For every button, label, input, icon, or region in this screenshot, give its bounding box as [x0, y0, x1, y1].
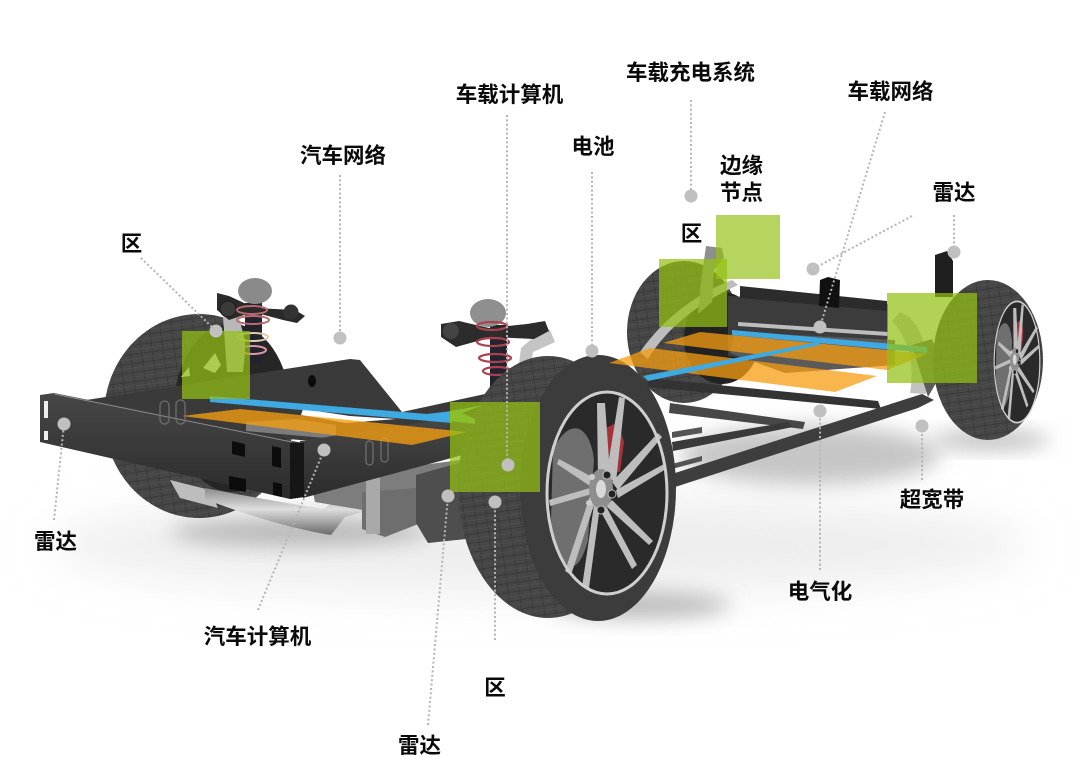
label: 区 rear: 区: [681, 222, 702, 246]
frame rails: [40, 359, 485, 499]
front strut: [441, 299, 555, 395]
zone: rear right: [887, 293, 977, 383]
zone blocks: [182, 215, 977, 492]
label: 超宽带: 超宽带: [900, 487, 964, 512]
label: 电气化: 电气化: [788, 580, 852, 604]
rear chassis: [640, 246, 953, 488]
undercarriage: [170, 460, 466, 543]
anchor dots: [58, 190, 960, 508]
label: 汽车计算机: 汽车计算机: [204, 625, 312, 649]
label: 区 bottom: 区: [484, 676, 506, 700]
label: 雷达 bottom: 雷达: [398, 734, 441, 758]
label: 汽车网络: 汽车网络: [300, 143, 386, 168]
zone: front right: [450, 402, 540, 492]
edge node block: [716, 215, 780, 279]
label: 边缘节点: 节点: [720, 181, 763, 205]
front battery plate: [182, 409, 467, 445]
label: 雷达 upper right: 雷达: [932, 181, 976, 205]
electrification plates: [182, 332, 927, 445]
floor shadows: [50, 425, 1050, 619]
far back wheel: [627, 261, 760, 403]
label: 车载网络: 车载网络: [847, 79, 934, 104]
network lines: [210, 330, 927, 424]
zone: front left: [182, 331, 250, 399]
label: 区 front left: 区: [121, 232, 142, 256]
label: 雷达 left: 雷达: [34, 530, 77, 554]
zone: rear left: [659, 259, 727, 327]
label: 边缘节点: [720, 154, 763, 205]
label: 边缘节点: 边缘: [720, 154, 763, 178]
far left wheel: [104, 314, 294, 518]
chassis illustration: [40, 246, 1043, 621]
left suspension strut: [217, 278, 305, 372]
right wheel: [933, 280, 1043, 440]
labels: [34, 60, 976, 758]
label: 电池: 电池: [571, 135, 615, 159]
rear battery plates: [663, 332, 927, 370]
label: 车载计算机: 车载计算机: [456, 83, 564, 107]
front wheel: [458, 355, 676, 621]
label: 车载充电系统: 车载充电系统: [626, 60, 755, 85]
leader lines: [54, 100, 954, 725]
